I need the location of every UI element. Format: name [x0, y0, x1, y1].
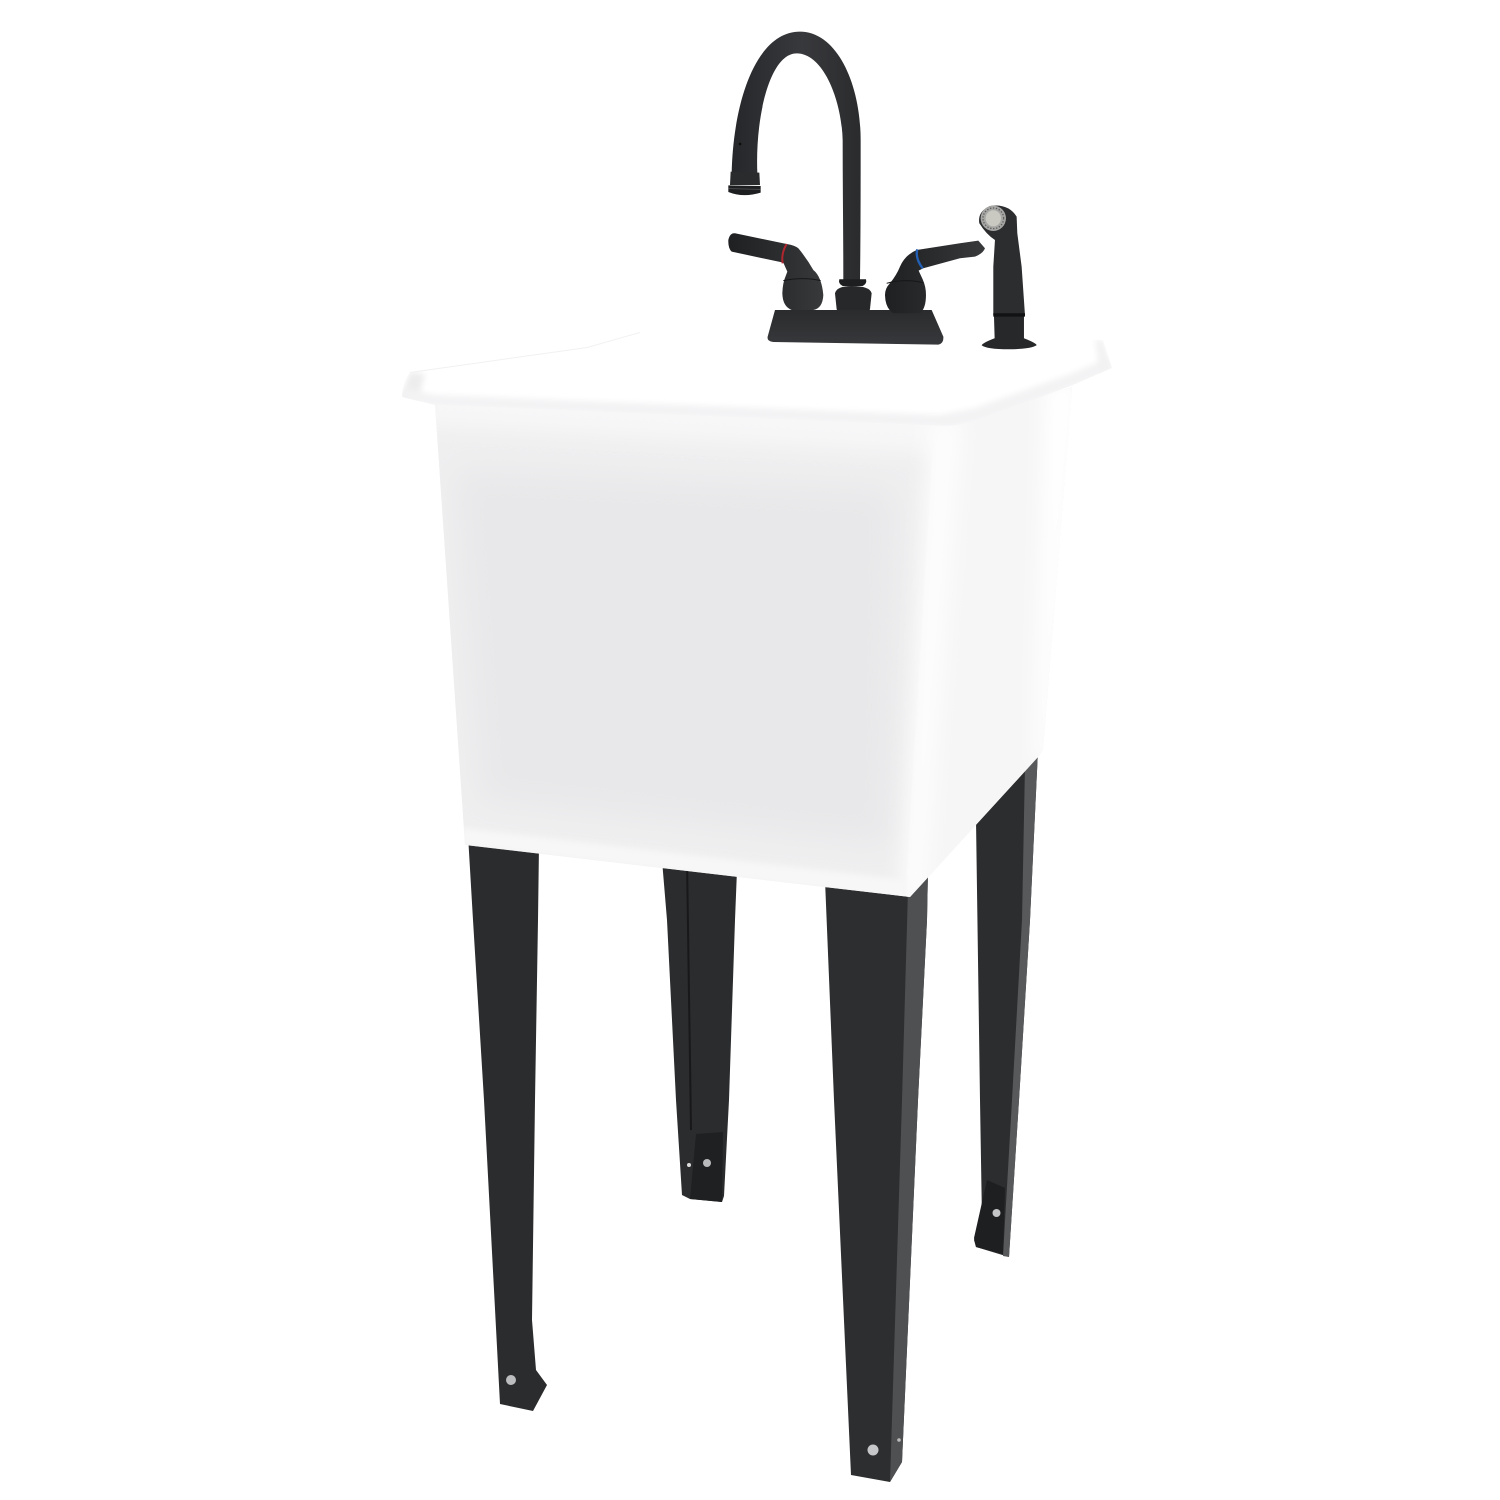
- leg: front left: [468, 835, 547, 1411]
- leg: rear left: [662, 860, 737, 1202]
- right handle with blue ring: [885, 241, 985, 313]
- deck plate: [768, 310, 943, 345]
- left handle with red ring: [728, 233, 823, 310]
- leg: front right: [825, 870, 928, 1482]
- spout: [728, 32, 861, 280]
- tub body: [435, 402, 1038, 897]
- leg: rear right: [974, 750, 1038, 1257]
- tub rim: [402, 332, 1112, 426]
- illustration: utility sink with faucet and black legs: [402, 32, 1112, 1482]
- faucet: [728, 32, 1037, 349]
- side sprayer: [979, 206, 1037, 349]
- spout collar: [835, 279, 872, 314]
